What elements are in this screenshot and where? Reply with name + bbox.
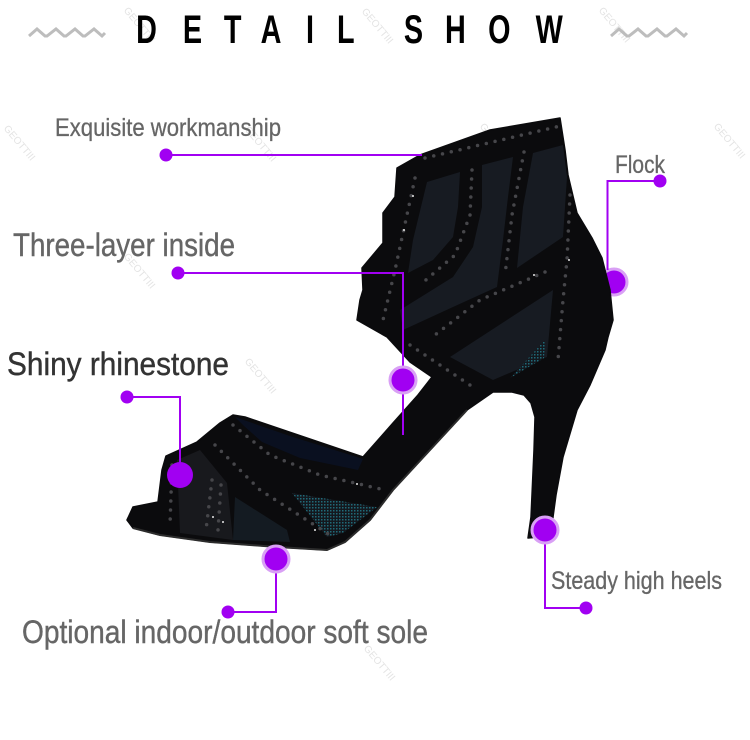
label: Shiny rhinestone: Shiny rhinestone	[7, 346, 229, 382]
ornament: right waves	[611, 29, 687, 36]
teal mesh sheen	[510, 340, 545, 378]
stone sparkles	[212, 195, 570, 531]
label: Exquisite workmanship: Exquisite workmanship	[55, 114, 281, 142]
mesh panels	[177, 145, 567, 542]
watermarks: GEOTTIII	[711, 121, 747, 161]
label: Optional indoor/outdoor soft sole: Optional indoor/outdoor soft sole	[22, 614, 428, 650]
watermarks: GEOTTIII	[242, 124, 278, 164]
ornament: left waves	[29, 29, 105, 36]
watermarks: GEOTTIII	[1, 123, 37, 163]
watermarks: GEOTTIII	[121, 5, 157, 45]
label: Steady high heels: Steady high heels	[551, 567, 722, 595]
label: Flock: Flock	[615, 151, 665, 179]
callout: Three-layer inside	[172, 266, 416, 435]
watermarks: GEOTTIII	[359, 6, 395, 46]
watermarks: GEOTTIII	[477, 121, 513, 161]
sole edge	[133, 410, 467, 550]
callout: Flock	[608, 174, 666, 270]
marker: flock big dot behind shoe	[601, 269, 627, 295]
watermarks: GEOTTIII	[242, 356, 278, 396]
watermarks: GEOTTIII	[121, 251, 157, 291]
rhinestones	[170, 126, 570, 535]
callout: Steady high heels	[532, 517, 592, 614]
watermarks: GEOTTIII	[596, 5, 632, 45]
callout: soft sole	[222, 546, 289, 618]
callout: Exquisite workmanship	[160, 148, 422, 162]
label: Three-layer inside: Three-layer inside	[13, 227, 235, 263]
watermarks: GEOTTIII	[361, 643, 397, 683]
insole opening	[235, 417, 363, 470]
callout: Shiny rhinestone	[120, 390, 193, 488]
title: DETAILSHOW	[136, 7, 563, 52]
shoe silhouette	[127, 118, 613, 550]
shoe	[127, 118, 613, 550]
